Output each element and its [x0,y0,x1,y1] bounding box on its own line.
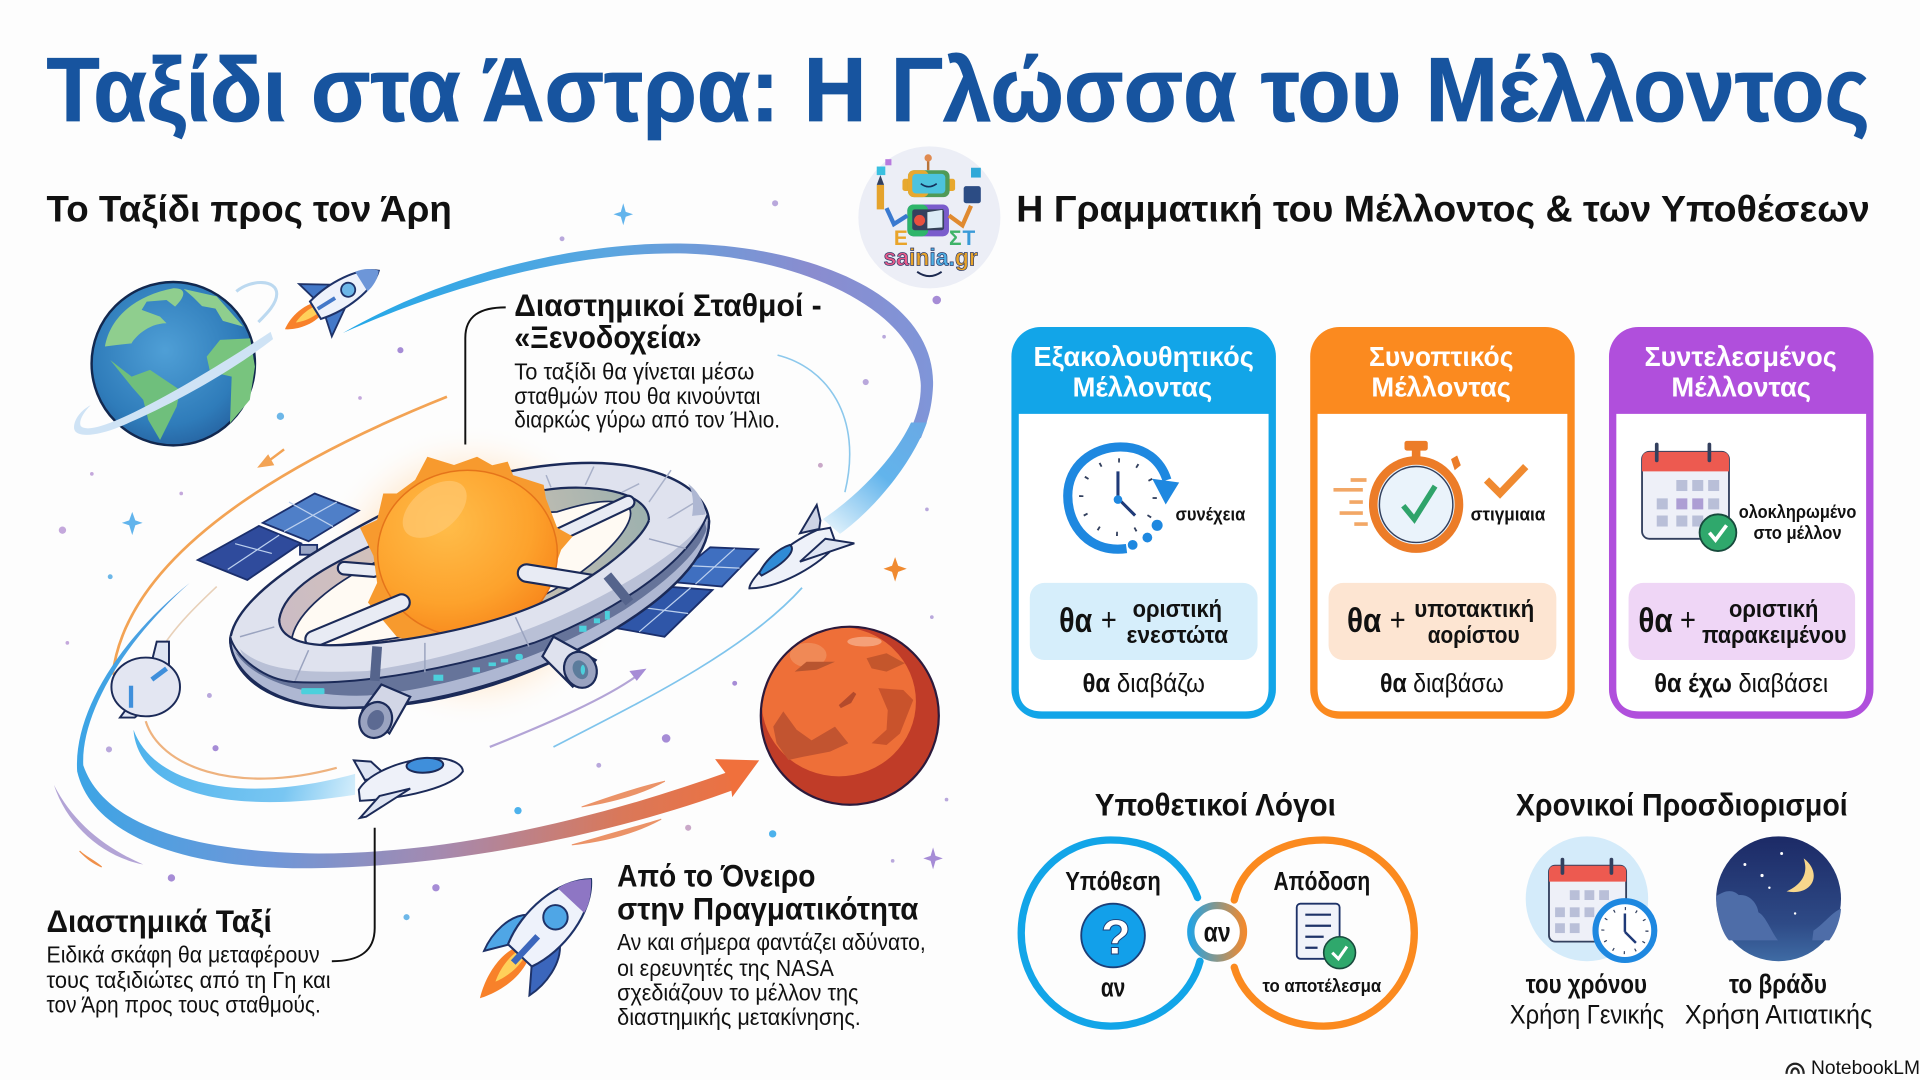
text block: space taxis: Διαστημικά Ταξί [47,904,272,939]
card header: Συνοπτικός [1369,341,1513,372]
panel: time expressions [1510,788,1872,1030]
formula box: ενεστώτα [1127,622,1228,649]
label: genitive: του χρόνου [1526,969,1647,999]
formula box: υποτακτική [1414,596,1534,623]
icon: looping clock [1068,447,1179,550]
NotebookLM watermark: NotebookLM [1811,1058,1920,1079]
icon label: συνέχεια [1176,503,1246,524]
solar panels [198,493,758,637]
panel: space illustration [54,200,948,1023]
icon: sainia.gr robot logo [858,146,1000,288]
ring: back [230,463,709,708]
panel: simple future card [1310,327,1575,719]
card header [1644,341,1837,403]
badge: if: αν [1204,917,1231,948]
text block: space taxis [47,904,331,1018]
label: accusative: Χρήση Αιτιατικής [1685,1000,1872,1030]
heading: grammar of the future: Η Γραμματική του Μέλλοντος & των Υποθέσεων [1016,189,1870,230]
card frame [1011,327,1276,719]
orbit: upper trajectory [343,244,933,534]
text block: from dream to reality: στην Πραγματικότητα [617,892,918,927]
text block: space stations: Διαστημικοί Σταθμοί - [514,288,822,323]
formula box: + [1101,602,1117,638]
label: accusative: το βράδυ [1729,969,1827,999]
callout line: space stations [465,307,506,444]
panel: conditional sentences [1021,788,1414,1026]
icon: stopwatch [1333,441,1526,549]
formula box: θα [1059,602,1092,640]
sun glow [312,422,631,729]
formula box [1329,583,1556,660]
formula box [1030,583,1258,660]
card header: Συντελεσμένος [1644,341,1837,372]
icon label: στο μέλλον [1753,522,1842,543]
text block: space stations: διαρκώς γύρω από τον Ήλιο. [514,406,780,432]
icon label: ολοκληρωμένο [1739,501,1856,522]
engine pods [353,637,603,743]
icon label [1739,501,1856,543]
text block: space stations [514,288,822,432]
circle: apodosis: το αποτέλεσμα [1262,975,1382,996]
label: genitive [1510,969,1664,1030]
formula box: θα [1638,602,1673,640]
circle: hypothesis: ? [1101,911,1131,965]
icon: night sky [1716,836,1841,961]
heading: Χρονικοί Προσδιορισμοί [1516,788,1848,823]
formula box: οριστική [1133,596,1222,623]
badge: if [1191,906,1243,958]
formula box: αορίστου [1428,622,1520,649]
sun [360,457,573,643]
panel: space station around the sun [198,422,758,743]
formula box: θα [1347,602,1381,640]
text block: from dream to reality: σχεδιάζουν το μέλλον της [617,979,858,1005]
starfield [59,200,948,920]
text block: from dream to reality [617,859,926,1030]
label: genitive: Χρήση Γενικής [1510,1000,1664,1030]
text block: space stations: «Ξενοδοχεία» [514,320,702,355]
icon: dream rocket [455,856,618,1023]
card frame [1609,327,1873,719]
icon: right shuttle [749,505,854,588]
text block: from dream to reality: διαστημικής μετακίνησης. [617,1004,861,1030]
card header: Μέλλοντας [1671,372,1811,403]
icon: calendar with check [1642,444,1736,551]
label: accusative [1685,969,1872,1030]
formula box: + [1390,602,1406,638]
heading: journey to Mars: Το Ταξίδι προς τον Άρη [47,189,452,230]
formula box: οριστική [1729,596,1818,623]
text block: space taxis: τον Άρη προς τους σταθμούς. [47,992,321,1018]
formula box [1629,583,1855,660]
text block: from dream to reality: Από το Όνειρο [617,859,816,894]
title: Ταξίδι στα Άστρα: Η Γλώσσα του Μέλλοντος [47,40,1870,141]
circle: hypothesis [1021,840,1200,1026]
circle: hypothesis: Υπόθεση [1065,866,1161,896]
card header: Εξακολουθητικός [1033,341,1254,372]
example: θα διαβάζω [1082,670,1205,698]
text block: from dream to reality: Αν και σήμερα φαντάζει αδύνατο, [617,929,926,955]
icon: sainia.gr robot logo: Σ [949,227,961,250]
panel: future perfect card [1609,327,1873,719]
callout line: space taxis [332,828,375,961]
icon: sainia.gr robot logo: Ε [894,227,908,250]
formula box: + [1680,602,1696,638]
example: θα διαβάσω [1380,670,1504,698]
heading: Υποθετικοί Λόγοι [1095,788,1336,823]
circle: apodosis [1234,840,1414,1026]
card header: Μέλλοντας [1073,372,1212,403]
icon: sainia.gr robot logo: Τ [962,227,975,250]
icon: calendar and clock [1526,836,1654,961]
icon: earth [74,282,277,445]
spokes behind the sun [344,502,628,571]
text block: space stations: Το ταξίδι θα γίνεται μέσω [514,359,754,385]
card header: Μέλλοντας [1371,372,1511,403]
formula box: παρακειμένου [1702,622,1847,649]
card header [1033,341,1254,403]
text block: space taxis: Ειδικά σκάφη θα μεταφέρουν [47,941,320,967]
text block: from dream to reality: οι ερευνητές της NASA [617,955,835,981]
icon: rocket leaving earth [269,245,395,355]
circle: apodosis: Απόδοση [1273,866,1370,896]
orbit: lower trajectory with arrow to Mars [54,397,802,868]
text block: space stations: σταθμών που θα κινούνται [514,383,760,409]
panel: continuous future card [1011,327,1276,719]
ring: front [230,514,709,708]
circle: hypothesis: αν [1101,973,1125,1003]
text block: space taxis: τους ταξιδιώτες από τη Γη και [47,967,331,993]
card frame [1310,327,1575,719]
icon: left pod shuttle [111,642,180,718]
station lights [301,611,610,694]
card header [1369,341,1513,403]
icon: sainia.gr robot logo: sainia.gr [883,245,978,272]
icon label: στιγμιαια [1471,503,1546,524]
icon: mars [761,627,939,805]
icon: taxi shuttle [354,757,463,818]
spokes in front of the sun [313,573,602,639]
example: θα έχω διαβάσει [1654,670,1828,698]
